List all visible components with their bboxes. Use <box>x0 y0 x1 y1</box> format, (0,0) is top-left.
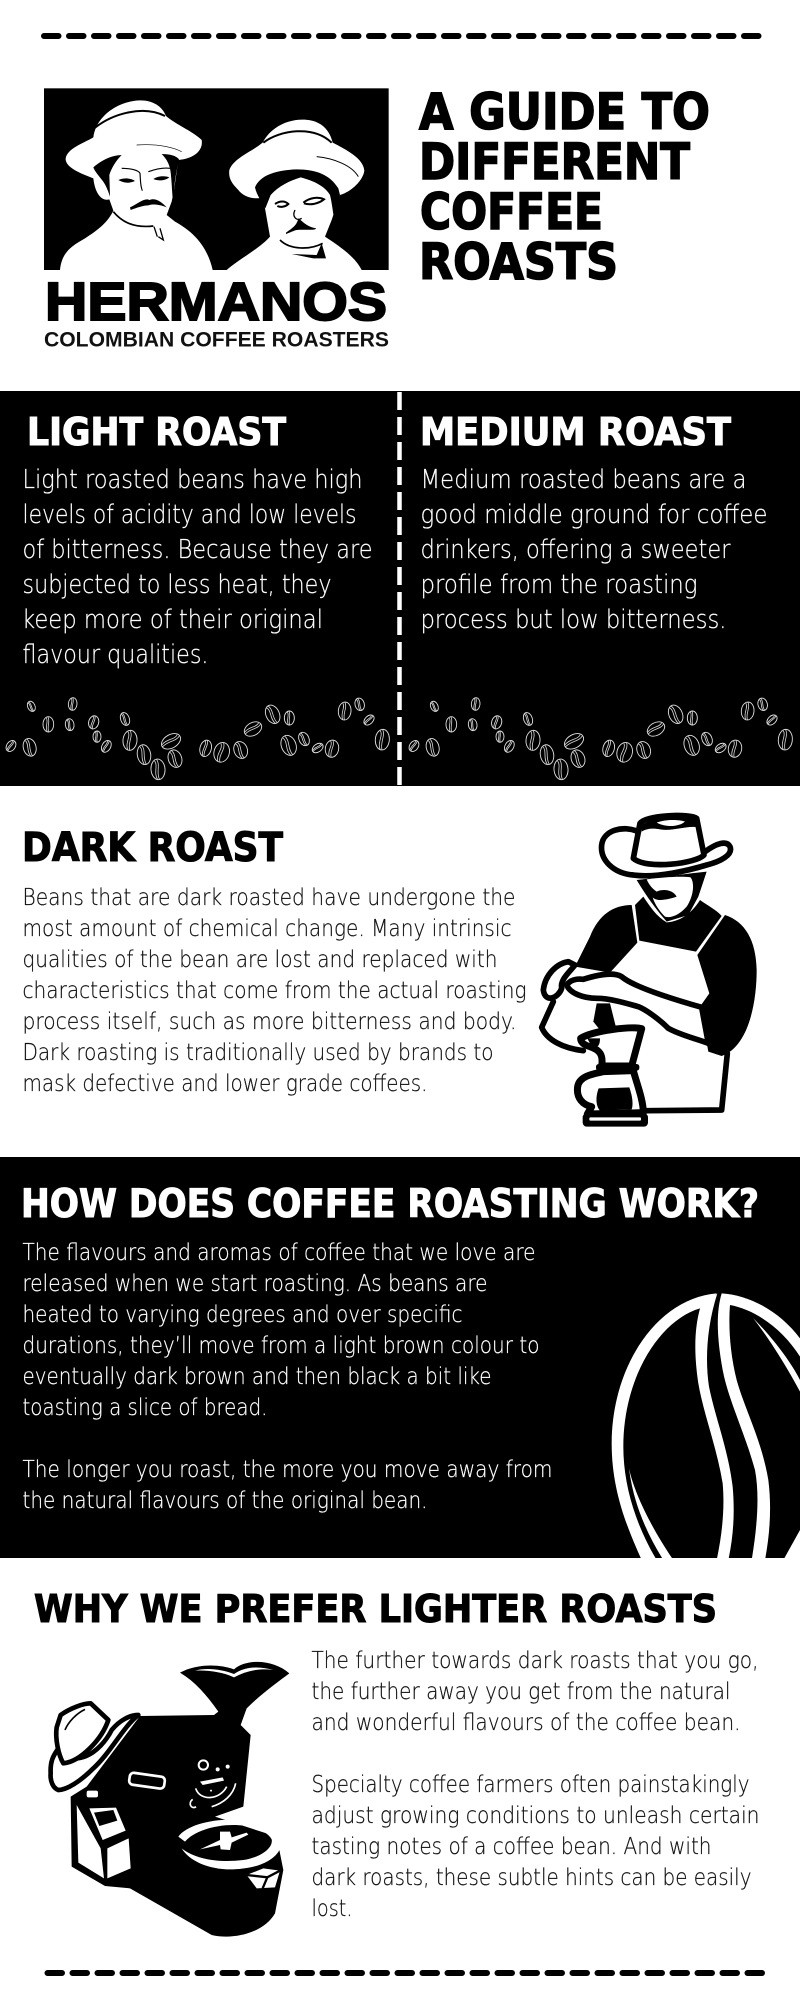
text: why lighter roasts <box>312 1648 760 1922</box>
heading: light roast: LIGHT ROAST <box>27 410 286 454</box>
box right face <box>107 1838 131 1878</box>
left brother <box>60 100 213 270</box>
text: roasting explanation: durations, they’ll move from a light brown colour to <box>22 1333 540 1359</box>
logo wordmark HERMANOS: HERMANOS <box>45 272 387 332</box>
title: ROASTS <box>419 233 618 291</box>
logo portrait panel <box>44 88 389 270</box>
text: medium roast: process but low bitterness. <box>420 605 726 635</box>
title: DIFFERENT <box>419 133 690 191</box>
heading: why we prefer lighter roasts: WHY WE PREFER LIGHTER ROASTS <box>34 1587 717 1631</box>
panel: why we prefer lighter roasts <box>34 1587 760 1937</box>
text: roasting explanation: The longer you roast, the more you move away from <box>22 1457 552 1483</box>
coffee beans pattern: left <box>4 697 390 780</box>
top dashed rule <box>44 33 762 39</box>
text: dark roast: qualities of the bean are lost and replaced with <box>22 947 498 973</box>
icon: coffee roasting machine <box>51 1662 289 1937</box>
bottom dashed rule <box>48 1970 766 1976</box>
text: why lighter roasts: the further away you get from the natural <box>312 1679 730 1705</box>
text: dark roast: mask defective and lower grade coffees. <box>22 1071 428 1097</box>
text: dark roast: most amount of chemical change. Many intrinsic <box>22 916 512 942</box>
logo: Hermanos Colombian Coffee Roasters <box>44 88 389 352</box>
text: light roast <box>22 465 372 670</box>
title: COFFEE <box>420 183 603 241</box>
text: roasting explanation: released when we start roasting. As beans are <box>22 1271 488 1297</box>
box left face <box>77 1805 104 1878</box>
text: roasting explanation: The flavours and aromas of coffee that we love are <box>22 1240 536 1266</box>
text: medium roast: drinkers, offering a sweeter <box>420 535 731 565</box>
heading: dark roast: DARK ROAST <box>22 825 284 871</box>
text: why lighter roasts: tasting notes of a coffee bean. And with <box>312 1834 712 1860</box>
text: light roast: of bitterness. Because they are <box>22 535 372 565</box>
text: roasting explanation: the natural flavours of the original bean. <box>22 1488 428 1514</box>
text: dark roast: Beans that are dark roasted have undergone the <box>22 885 516 911</box>
text: light roast: levels of acidity and low levels <box>22 500 356 530</box>
title <box>419 83 710 291</box>
text: medium roast: Medium roasted beans are a <box>420 465 746 495</box>
text: dark roast: Dark roasting is traditionally used by brands to <box>22 1040 494 1066</box>
text: light roast: keep more of their original <box>22 605 323 635</box>
logo tagline: COLOMBIAN COFFEE ROASTERS <box>44 328 389 352</box>
title: A GUIDE TO <box>419 83 710 141</box>
text: light roast: flavour qualities. <box>22 640 208 670</box>
right brother <box>227 120 364 270</box>
coffee beans pattern: right <box>407 697 793 780</box>
text: roasting explanation: toasting a slice of bread. <box>22 1395 268 1421</box>
text: dark roast: characteristics that come from the actual roasting <box>22 978 526 1004</box>
icon: barista pouring coffee <box>542 816 757 1127</box>
text: light roast: Light roasted beans have high <box>22 465 362 495</box>
text: light roast: subjected to less heat, they <box>22 570 332 600</box>
heading: medium roast: MEDIUM ROAST <box>420 410 731 454</box>
text: roasting explanation: eventually dark brown and then black a bit like <box>22 1364 492 1390</box>
text: dark roast: process itself, such as more bitterness and body. <box>22 1009 516 1035</box>
text: medium roast <box>420 465 768 635</box>
text: why lighter roasts: lost. <box>312 1896 352 1922</box>
panel: how does coffee roasting work <box>0 1157 800 1560</box>
text: medium roast: good middle ground for coffee <box>420 500 768 530</box>
text: roasting explanation: heated to varying degrees and over specific <box>22 1302 462 1328</box>
text: dark roast <box>22 885 526 1097</box>
text: roasting explanation <box>22 1240 552 1514</box>
panel: dark roast <box>22 816 757 1127</box>
centre dashed divider <box>397 392 402 786</box>
icon: large coffee bean <box>612 1293 800 1558</box>
text: medium roast: profile from the roasting <box>420 570 698 600</box>
text: why lighter roasts: and wonderful flavours of the coffee bean. <box>312 1710 740 1736</box>
box top face <box>89 1808 126 1840</box>
panel: light and medium roast <box>0 391 800 786</box>
